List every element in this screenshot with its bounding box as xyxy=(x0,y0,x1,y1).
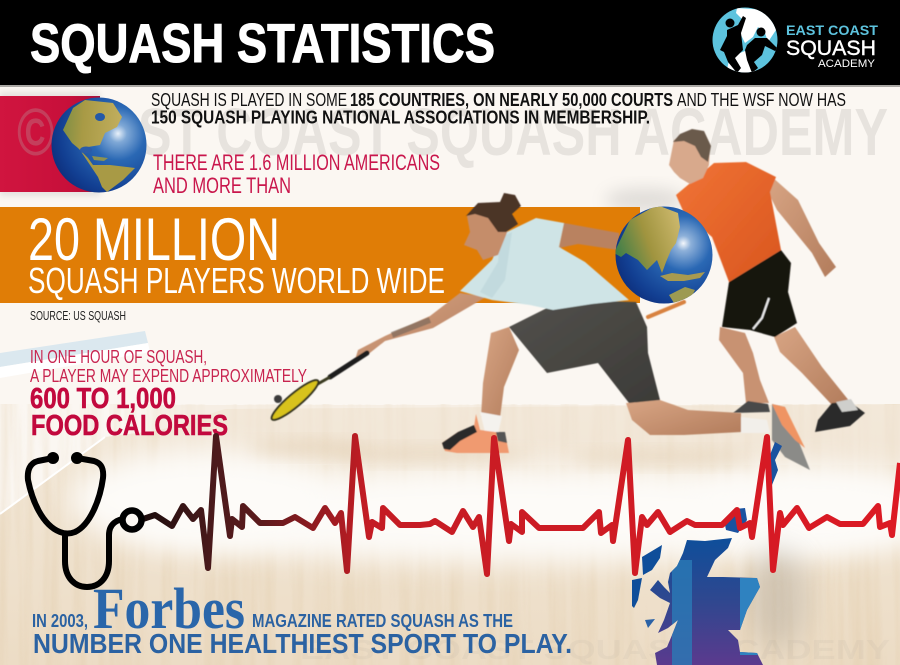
logo text: SQUASH xyxy=(786,37,876,60)
trailing leg xyxy=(626,400,741,435)
text block: countries and courts xyxy=(151,90,846,128)
text block: Forbes xyxy=(32,576,572,659)
orange banner xyxy=(0,207,640,303)
big stat: 20 million players: 20 MILLION xyxy=(28,206,280,273)
Forbes wordmark: Forbes xyxy=(93,576,245,641)
Shetland xyxy=(764,442,782,485)
shoes xyxy=(815,402,865,432)
Outer Hebrides xyxy=(632,578,642,608)
icon: stethoscope xyxy=(28,455,142,587)
stat: food calories xyxy=(30,383,228,442)
logo badge xyxy=(712,7,778,73)
leading shoe xyxy=(442,414,509,453)
dark shorts xyxy=(509,300,660,403)
text block: countries and courts: SQUASH IS PLAYED IN SOME xyxy=(151,90,347,110)
ball xyxy=(274,395,282,403)
hair xyxy=(673,129,711,162)
black shorts xyxy=(722,250,797,337)
islands xyxy=(645,619,655,628)
text block: Forbes: MAGAZINE RATED SQUASH AS THE xyxy=(252,611,513,631)
map of Scotland xyxy=(632,442,782,665)
red banner xyxy=(0,92,100,196)
front leg xyxy=(719,327,769,403)
text block: countries and courts: 150 SQUASH PLAYING NATIONAL ASSOCIATIONS IN MEMBERSHIP. xyxy=(151,108,650,128)
globe: Asia xyxy=(614,205,712,304)
trailing sock xyxy=(741,417,770,433)
Orkney xyxy=(724,508,747,533)
shorts stripe xyxy=(753,298,769,329)
stat: food calories: 600 TO 1,000 xyxy=(30,383,176,415)
hair and bun xyxy=(466,193,521,232)
Inner Hebrides xyxy=(642,545,662,575)
text block: Americans xyxy=(153,150,440,198)
title: SQUASH STATISTICS xyxy=(30,12,495,74)
logo: East Coast Squash Academy xyxy=(712,7,878,73)
text block: countries and courts: 185 COUNTRIES, ON NEARLY 50,000 COURTS xyxy=(350,90,673,110)
globe: Americas xyxy=(52,98,146,192)
big stat: 20 million players: SQUASH PLAYERS WORLD WIDE xyxy=(28,260,445,301)
light blue shirt xyxy=(460,218,629,310)
player in blue shirt xyxy=(268,193,810,470)
mainland xyxy=(650,538,763,665)
logo text xyxy=(786,22,878,70)
logo text: EAST COAST xyxy=(786,22,878,38)
leading arm xyxy=(354,293,486,363)
text block: calories intro: A PLAYER MAY EXPEND APPROXIMATELY xyxy=(30,365,307,386)
source note: SOURCE: US SQUASH xyxy=(30,308,126,323)
header bar xyxy=(0,0,900,87)
face xyxy=(464,205,510,260)
text block: Forbes: NUMBER ONE HEALTHIEST SPORT TO PLAY. xyxy=(33,628,572,659)
text block: Americans: AND MORE THAN xyxy=(153,173,291,198)
logo text: ACADEMY xyxy=(818,58,876,70)
shirt shading xyxy=(480,232,512,298)
stat: food calories: FOOD CALORIES xyxy=(31,410,228,442)
lower watermark: EAST COAST SQUASH ACADEMY xyxy=(300,634,890,665)
heartbeat line xyxy=(143,436,900,574)
arm tattoo xyxy=(392,320,430,335)
big stat: 20 million players xyxy=(28,206,445,301)
text block: Forbes: IN 2003, xyxy=(32,611,88,631)
right arm xyxy=(768,176,836,277)
racket xyxy=(268,353,367,424)
text block: countries and courts: AND THE WSF NOW HAS xyxy=(677,90,846,110)
text block: calories intro: IN ONE HOUR OF SQUASH, xyxy=(30,346,207,367)
trailing shoe xyxy=(772,404,810,470)
text block: Americans: THERE ARE 1.6 MILLION AMERICANS xyxy=(153,150,440,175)
player in orange shirt xyxy=(669,129,865,432)
leading leg xyxy=(481,327,519,418)
orange shirt xyxy=(676,162,781,282)
text block: calories intro xyxy=(30,346,307,386)
head xyxy=(669,131,710,184)
leading sock xyxy=(480,412,502,434)
back leg xyxy=(774,327,850,405)
rear arm xyxy=(559,223,619,250)
rear racket handle xyxy=(648,302,684,317)
